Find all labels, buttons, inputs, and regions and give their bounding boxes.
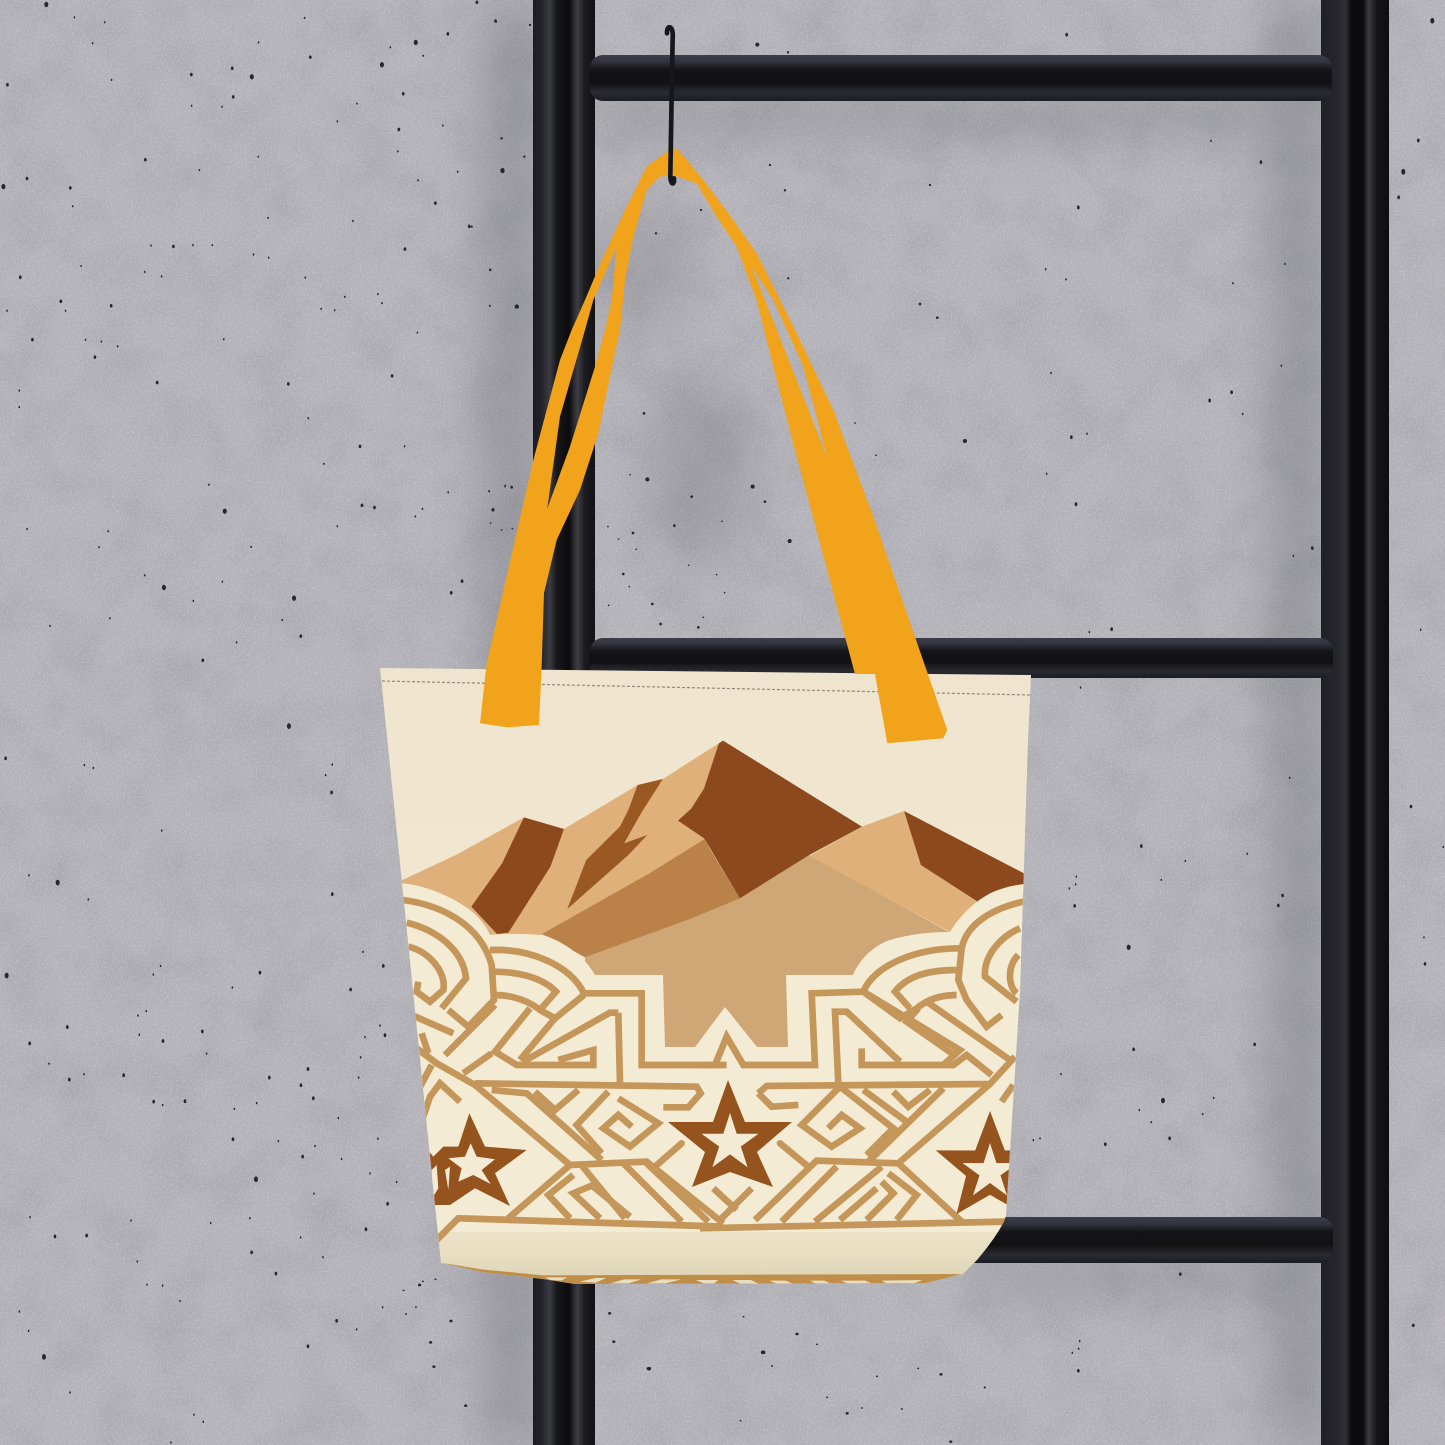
- gold knot pattern, right half: [700, 902, 1023, 1228]
- right mountain light face: [809, 811, 978, 932]
- mid tone slope: [542, 839, 740, 957]
- tote bag handles: [480, 149, 947, 743]
- right star: [936, 1111, 1010, 1214]
- ladder middle rung: [590, 638, 1333, 678]
- right handle: [670, 149, 947, 743]
- light mountain faces: [401, 741, 723, 957]
- ladder left rail: [533, 0, 595, 1445]
- left star pair: [422, 1113, 527, 1206]
- front sand slope: [605, 855, 949, 956]
- ladder bottom rung: [590, 1217, 1333, 1263]
- bottom seam pattern: [441, 1263, 961, 1284]
- lightning shaped crevice: [567, 779, 663, 909]
- main peak dark face: [678, 741, 862, 898]
- left dark ridge: [471, 817, 564, 934]
- cream pattern ground: [395, 883, 1035, 1232]
- top stitching: [382, 681, 1030, 695]
- ladder top rung: [590, 55, 1332, 101]
- ladder right rail: [1321, 0, 1389, 1445]
- mountain illustration: [395, 741, 1044, 1284]
- metal hook: [667, 27, 674, 183]
- tote bag body: [380, 668, 1044, 1284]
- bag cloth: [380, 668, 1031, 1284]
- left handle: [480, 149, 673, 727]
- gold knot pattern, left half: [403, 900, 727, 1242]
- center star: [668, 1080, 792, 1187]
- right peak dark face: [904, 811, 1024, 902]
- ladder: [533, 0, 1389, 1445]
